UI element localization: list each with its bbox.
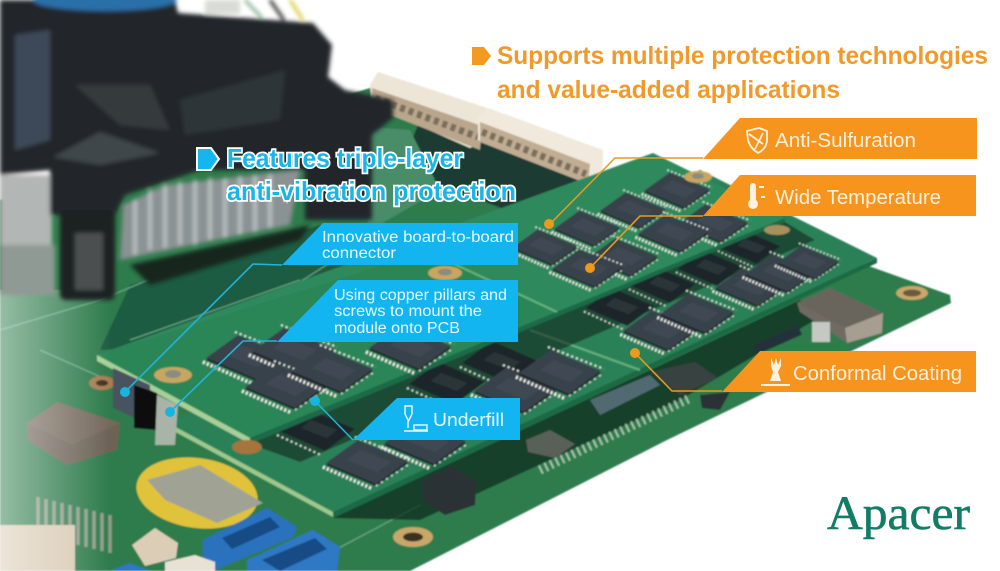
inductor: right — [797, 288, 883, 343]
fan hub — [33, 0, 177, 11]
coin battery — [132, 450, 263, 536]
connector: white slot 2 — [478, 108, 603, 184]
heatsink — [120, 170, 300, 260]
icon: blue arrow — [197, 148, 219, 170]
callout: board-to-board connector: Innovative board-to-board — [322, 229, 514, 246]
heading text: Supports multiple protection technologies — [497, 42, 988, 70]
shadow under lower module — [333, 300, 815, 520]
heading text: anti-vibration protection — [227, 176, 516, 206]
lower module — [168, 170, 877, 518]
icon: underfill nozzle — [404, 406, 428, 431]
upper module — [97, 153, 785, 444]
heading text — [497, 42, 988, 104]
callout: wide temperature — [585, 175, 976, 273]
heading: protection technologies — [472, 42, 988, 104]
connector: white slot 1 — [370, 72, 487, 150]
callout: copper pillars: screws to mount the — [334, 303, 482, 320]
callout: copper pillars: Using copper pillars and — [334, 287, 507, 304]
dark sockets — [400, 120, 600, 215]
callout: board-to-board connector: connector — [322, 245, 396, 262]
icon: coating nozzle — [761, 358, 790, 386]
icon: shield — [747, 128, 767, 153]
callout: underfill: Underfill — [433, 410, 504, 430]
wires — [245, 0, 303, 20]
callout: wide temperature: Wide Temperature — [775, 187, 941, 209]
header pins and beige connectors — [0, 497, 215, 571]
heading: triple-layer protection — [197, 143, 516, 206]
screws and mounting holes — [89, 171, 928, 547]
heading text: and value-added applications — [497, 76, 840, 104]
callout: conformal coating — [630, 348, 976, 392]
callout: copper pillars — [165, 280, 518, 417]
pale strip at top — [205, 0, 240, 14]
dark base under heatsink — [130, 225, 310, 285]
cooler frame and fan — [0, 0, 393, 220]
callout: copper pillars: module onto PCB — [334, 320, 460, 337]
shadow cast by upper module — [250, 222, 815, 462]
callout: conformal coating: Conformal Coating — [793, 363, 962, 385]
washed-out left edge — [0, 290, 110, 571]
callout: anti-sulfuration: Anti-Sulfuration — [775, 130, 916, 152]
heading text: Features triple-layer — [227, 143, 463, 173]
icon: orange arrow — [472, 47, 491, 65]
SATA connectors — [110, 508, 340, 571]
heading text — [227, 143, 516, 206]
small chips and resistors — [422, 330, 800, 515]
callout: anti-sulfuration — [544, 118, 977, 229]
inductor: left — [27, 402, 120, 465]
icon: thermometer — [748, 183, 765, 209]
left fins base — [0, 175, 52, 250]
photo: CPU cooler — [0, 0, 393, 300]
logo: Apacer: Apacer — [827, 487, 970, 540]
dark board area behind the modules — [100, 225, 450, 350]
board-to-board connector and copper pillar — [113, 368, 178, 445]
callout: board-to-board connector — [120, 223, 518, 397]
callout: underfill — [310, 396, 520, 440]
board traces — [0, 250, 420, 550]
retention leg — [60, 210, 115, 300]
